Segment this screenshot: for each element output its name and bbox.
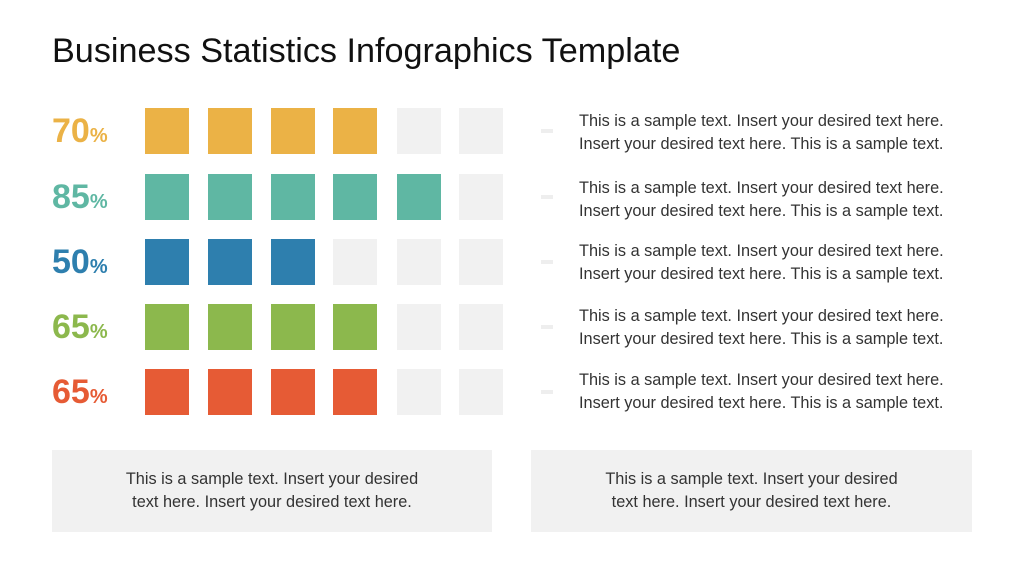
panel: bottom left text: This is a sample text. Insert your desired	[126, 470, 418, 488]
text row 4: Insert your desired text here. This is a sample text.	[579, 330, 943, 348]
row: 65% green	[52, 304, 944, 350]
panel: bottom left text: text here. Insert your desired text here.	[132, 493, 412, 511]
text row 5	[579, 371, 944, 412]
title: Business Statistics Infographics Template	[52, 32, 680, 70]
text row 1: This is a sample text. Insert your desired text here.	[579, 112, 944, 130]
panel: bottom left text	[52, 450, 492, 532]
text row 3: Insert your desired text here. This is a sample text.	[579, 264, 943, 282]
text row 3: This is a sample text. Insert your desired text here.	[579, 242, 944, 260]
row: 65% red	[52, 369, 944, 415]
text row 1	[579, 112, 944, 152]
label 85%: 85%	[52, 178, 108, 216]
text row 2: Insert your desired text here. This is a sample text.	[579, 202, 943, 220]
label 50%: 50%	[52, 243, 108, 281]
text row 5: Insert your desired text here. This is a sample text.	[579, 394, 943, 412]
label 70%: 70%	[52, 112, 108, 150]
label 65% red: 65%	[52, 373, 108, 411]
text row 3	[579, 242, 944, 282]
panel: bottom right text: text here. Insert your desired text here.	[612, 493, 891, 511]
squares row 1	[145, 108, 503, 154]
squares row 2	[145, 174, 503, 220]
row: 85%	[52, 174, 944, 220]
text row 2	[579, 179, 944, 220]
label 65% green: 65%	[52, 308, 108, 346]
panel: bottom right text	[531, 450, 972, 532]
text row 4: This is a sample text. Insert your desired text here.	[579, 307, 944, 325]
panel: bottom right text: This is a sample text. Insert your desired	[605, 470, 898, 488]
text row 5: This is a sample text. Insert your desired text here.	[579, 371, 944, 389]
text row 1: Insert your desired text here. This is a sample text.	[579, 134, 943, 152]
text row 4	[579, 307, 944, 348]
row: 50%	[52, 239, 944, 285]
text row 2: This is a sample text. Insert your desired text here.	[579, 179, 944, 197]
squares row 3	[145, 239, 503, 285]
row: 70%	[52, 108, 944, 154]
squares row 5	[145, 369, 503, 415]
squares row 4	[145, 304, 503, 350]
